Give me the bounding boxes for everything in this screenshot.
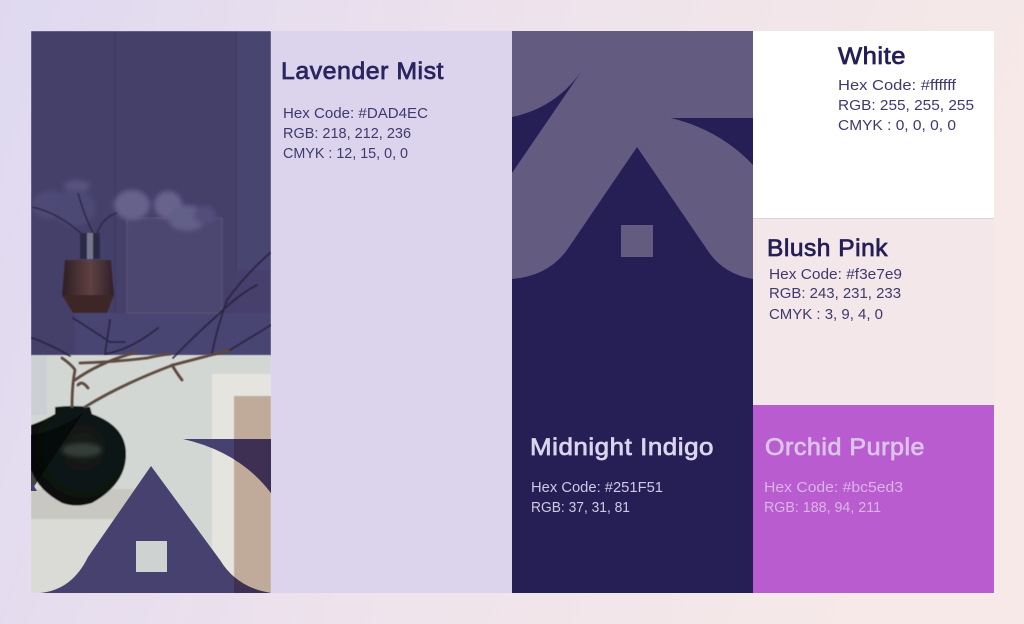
colour codes: White: Hex Code: #ffffff (838, 77, 957, 94)
colour codes: Lavender Mist: Hex Code: #DAD4EC (283, 105, 428, 122)
colour codes: Blush Pink: CMYK : 3, 9, 4, 0 (769, 306, 883, 323)
heading: Orchid Purple: Orchid Purple (765, 434, 925, 461)
photo: bare branches (32, 253, 271, 407)
colour codes: White: RGB: 255, 255, 255 (838, 97, 974, 114)
colour codes: White (838, 77, 974, 134)
photo: upper wall tinted purple (31, 31, 271, 356)
panel: interior photo with purple overlay and house logo (31, 31, 271, 593)
panel: Blush Pink (753, 218, 994, 406)
heading: White: White (838, 43, 906, 70)
heading: Midnight Indigo: Midnight Indigo (530, 434, 714, 461)
logo: enlarged house shape (512, 31, 753, 285)
photo: lower room with black vase (31, 355, 271, 593)
logo: purple house overlay (31, 413, 271, 593)
colour codes: Lavender Mist: CMYK : 12, 15, 0, 0 (283, 145, 408, 162)
heading: Blush Pink: Blush Pink (767, 235, 889, 262)
panel: White (753, 31, 994, 218)
colour codes: Blush Pink (769, 266, 902, 323)
panel: Orchid Purple (753, 405, 994, 593)
colour codes: Midnight Indigo: RGB: 37, 31, 81 (531, 499, 630, 516)
panel: Lavender Mist (271, 31, 512, 593)
colour codes: Lavender Mist: RGB: 218, 212, 236 (283, 125, 411, 142)
colour codes: White: CMYK : 0, 0, 0, 0 (838, 117, 956, 134)
panel: Midnight Indigo (512, 31, 753, 593)
colour codes: Orchid Purple: Hex Code: #bc5ed3 (764, 479, 903, 496)
colour codes: Midnight Indigo: Hex Code: #251F51 (531, 479, 663, 496)
colour codes: Blush Pink: RGB: 243, 231, 233 (769, 285, 901, 302)
colour codes: Blush Pink: Hex Code: #f3e7e9 (769, 266, 902, 283)
heading: Lavender Mist: Lavender Mist (281, 58, 444, 85)
colour codes: Lavender Mist (283, 105, 428, 162)
colour codes: Orchid Purple (764, 479, 903, 516)
colour codes: Midnight Indigo (531, 479, 663, 516)
colour codes: Orchid Purple: RGB: 188, 94, 211 (764, 499, 881, 516)
